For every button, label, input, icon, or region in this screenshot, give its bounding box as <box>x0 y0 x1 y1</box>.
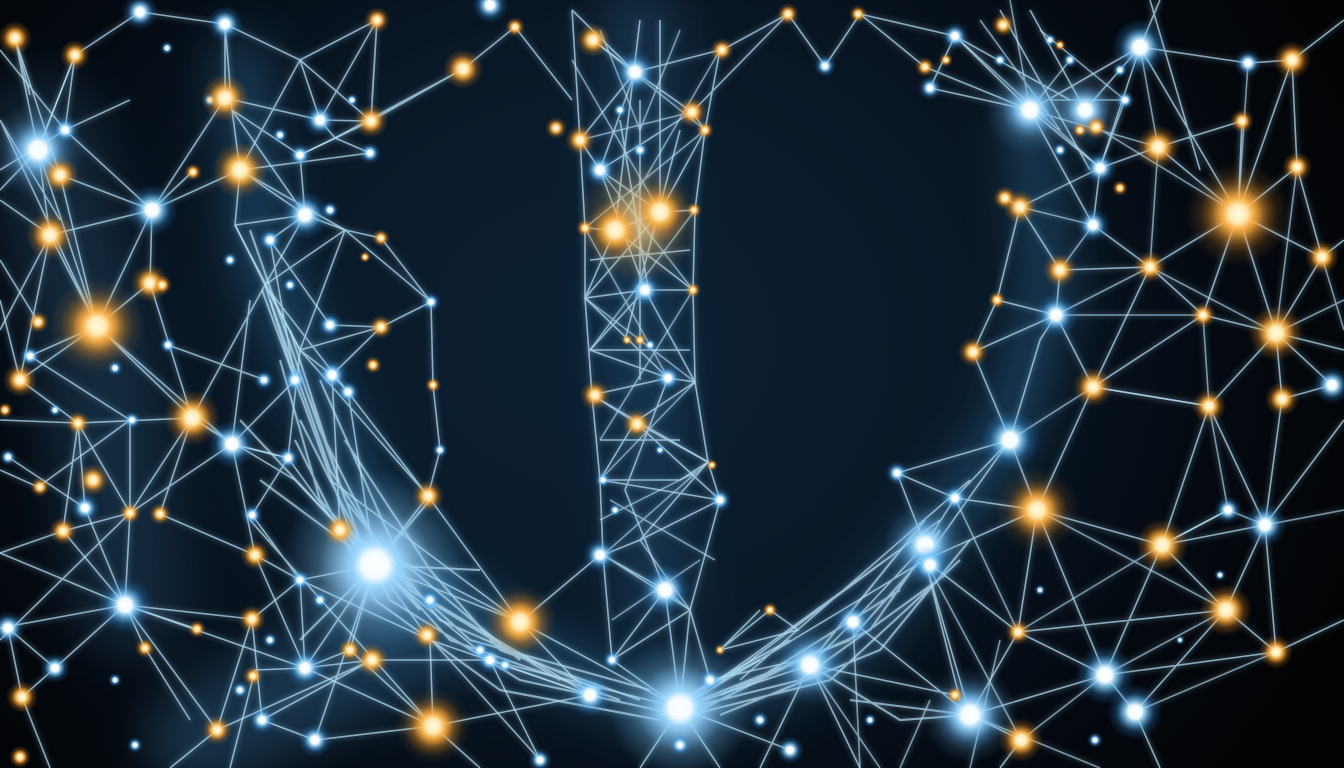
right ring and mesh lines <box>640 0 1344 768</box>
centre column lines <box>515 10 800 708</box>
left mesh lines <box>0 12 680 768</box>
soft blue haze along the network <box>40 20 1050 740</box>
